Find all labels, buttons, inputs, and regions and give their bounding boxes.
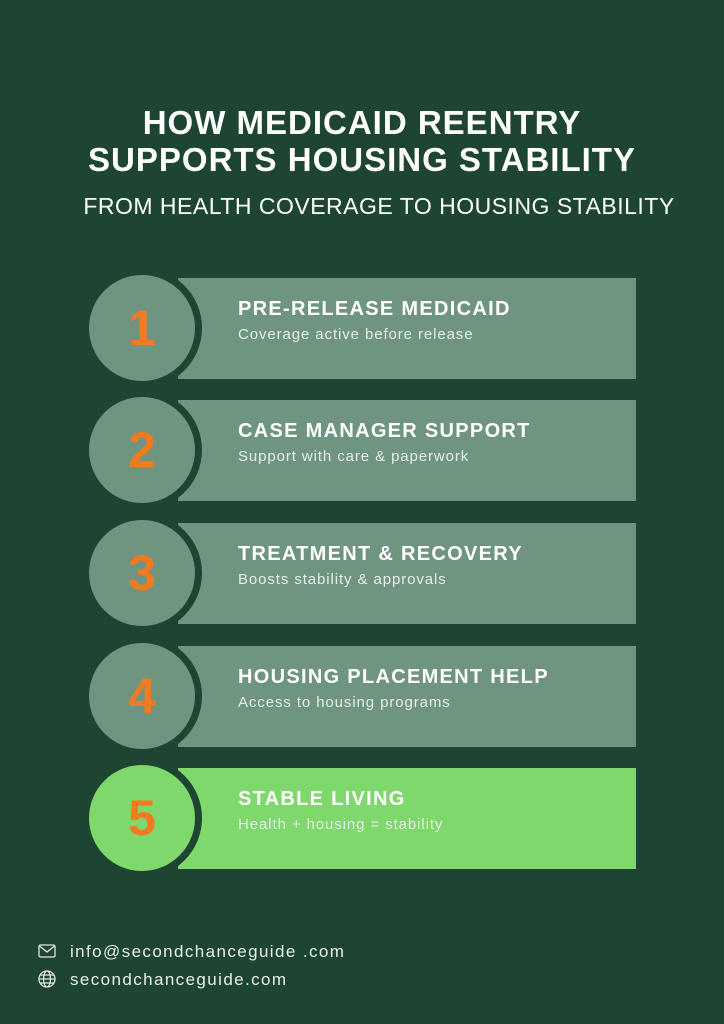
step 5: Health + housing = stability — [238, 816, 443, 833]
circle 5: 5 — [128, 790, 156, 846]
circle 4 — [82, 636, 202, 756]
step 1 — [178, 278, 636, 379]
step 4 — [178, 646, 636, 747]
step 1: Coverage active before release — [238, 326, 473, 343]
title — [88, 104, 636, 178]
circle 3 — [82, 513, 202, 633]
step 3: TREATMENT & RECOVERY — [238, 543, 523, 565]
step 4: Access to housing programs — [238, 694, 451, 711]
step 1: PRE-RELEASE MEDICAID — [238, 298, 511, 320]
circle 4: 4 — [128, 668, 156, 724]
step 2 — [178, 400, 636, 501]
step 2: Support with care & paperwork — [238, 448, 469, 465]
circle 2 — [82, 390, 202, 510]
step 3 — [178, 523, 636, 624]
footer website: secondchanceguide.com — [70, 970, 287, 989]
circle 3: 3 — [128, 545, 156, 601]
subtitle: FROM HEALTH COVERAGE TO HOUSING STABILITY — [83, 193, 675, 219]
step 2: CASE MANAGER SUPPORT — [238, 420, 531, 442]
title: HOW MEDICAID REENTRY — [143, 104, 581, 141]
circle 5 — [82, 758, 202, 878]
footer email: info@secondchanceguide .com — [70, 942, 345, 961]
circle 2: 2 — [128, 422, 156, 478]
step 4: HOUSING PLACEMENT HELP — [238, 666, 549, 688]
step 5 — [178, 768, 636, 869]
circle 1: 1 — [128, 300, 156, 356]
title: SUPPORTS HOUSING STABILITY — [88, 141, 636, 178]
circle 1 — [82, 268, 202, 388]
step 3: Boosts stability & approvals — [238, 571, 447, 588]
step 5: STABLE LIVING — [238, 788, 406, 810]
